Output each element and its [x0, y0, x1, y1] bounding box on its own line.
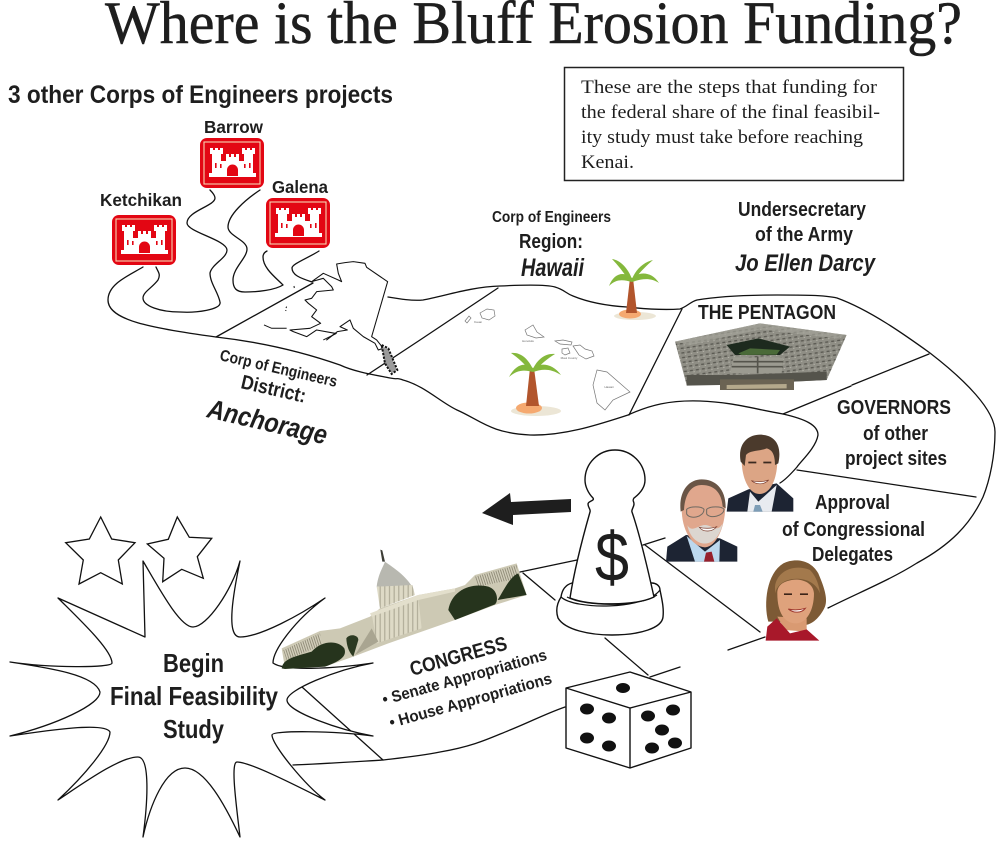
text box: funding steps explanation	[564, 68, 904, 180]
label: Congress: • House Appropriations	[388, 671, 554, 732]
label: Congressional Delegates: of Congressional	[782, 519, 925, 541]
map: Hawaiian islands: Maui County	[561, 356, 578, 360]
shield: Ketchikan	[112, 215, 176, 265]
label: Governors: of other	[863, 423, 928, 445]
label: Undersecretary of the Army: Jo Ellen Darcy	[735, 250, 876, 277]
shield: Barrow	[200, 138, 264, 188]
label: Anchorage district: District:	[239, 371, 308, 408]
dollar sign: $	[595, 518, 629, 596]
starburst: Begin Final Feasibility Study: Begin	[163, 648, 224, 678]
label: Hawaii region: Hawaii	[521, 254, 585, 282]
map: Hawaiian islands: Honolulu	[522, 339, 534, 343]
photo: US Capitol	[282, 550, 527, 669]
label: Governors: project sites	[845, 448, 947, 470]
label: Barrow: Barrow	[204, 117, 263, 137]
river: Barrow road	[228, 190, 283, 292]
river: Galena road	[292, 251, 319, 282]
board space dividers	[216, 283, 976, 760]
game piece: dollar pawn	[557, 450, 663, 635]
label: Congress: • Senate Appropriations	[381, 647, 549, 709]
label: Galena: Galena	[272, 177, 328, 197]
heading: other projects: 3 other Corps of Engineers projects	[8, 81, 393, 109]
label: Anchorage district: Anchorage	[204, 393, 330, 450]
shield: Galena	[266, 198, 330, 248]
path: lower board edge past dice	[293, 637, 765, 765]
map: Alaska	[264, 262, 397, 374]
portrait: Don Young	[666, 479, 737, 562]
map: Hawaiian islands: Hawaii	[604, 385, 614, 389]
starburst: Begin Final Feasibility Study: Study	[163, 714, 224, 744]
text box: funding steps explanation: ity study must take before reaching	[581, 128, 863, 148]
map: Hawaiian islands	[465, 309, 630, 410]
label: Hawaii region: Corp of Engineers	[492, 209, 611, 226]
game piece: die	[566, 672, 691, 768]
label: Governors: GOVERNORS	[837, 397, 951, 419]
text box: funding steps explanation: Kenai.	[581, 153, 634, 173]
path: lower edge from Ketchikan to governors	[108, 267, 818, 483]
starburst: Begin Final Feasibility Study: Final Feasibility	[110, 681, 278, 711]
icon: palm tree lower	[509, 353, 561, 416]
path: board edge under pawn	[520, 538, 665, 572]
photo: Pentagon building	[675, 323, 847, 390]
river: Ketchikan road	[143, 190, 227, 312]
label: Undersecretary of the Army: of the Army	[755, 224, 854, 246]
label: Governors	[837, 397, 951, 470]
portrait: Mark Begich	[727, 435, 793, 512]
icon: star right	[147, 517, 212, 582]
game board path	[108, 190, 995, 765]
label: Undersecretary of the Army	[735, 199, 876, 277]
label: Congressional Delegates: Delegates	[812, 544, 893, 566]
label: Anchorage district	[204, 347, 339, 450]
label: Congressional Delegates: Approval	[815, 492, 890, 514]
label: Congressional Delegates	[782, 492, 925, 566]
label: The Pentagon: THE PENTAGON	[698, 302, 836, 324]
icon: star left	[66, 517, 135, 584]
label: Ketchikan: Ketchikan	[100, 190, 182, 210]
label: Hawaii region	[492, 209, 611, 282]
label: Anchorage district: Corp of Engineers	[218, 347, 339, 391]
label: Undersecretary of the Army: Undersecretary	[738, 199, 867, 221]
icon: palm tree upper	[609, 259, 659, 320]
arrow: direction of travel	[482, 493, 571, 525]
label: Congress: CONGRESS	[407, 633, 510, 681]
starburst: Begin Final Feasibility Study	[10, 561, 373, 837]
portrait: Lisa Murkowski	[766, 560, 826, 641]
label: Hawaii region: Region:	[519, 231, 583, 253]
text box: funding steps explanation: the federal share of the final feasibil-	[581, 103, 880, 123]
text box: funding steps explanation: These are the steps that funding for	[581, 78, 877, 98]
label: Congress	[381, 633, 554, 732]
path: upper edge from Alaska to Pentagon and around to delegates	[388, 285, 995, 608]
map: Hawaiian islands: Kauai	[474, 320, 482, 324]
